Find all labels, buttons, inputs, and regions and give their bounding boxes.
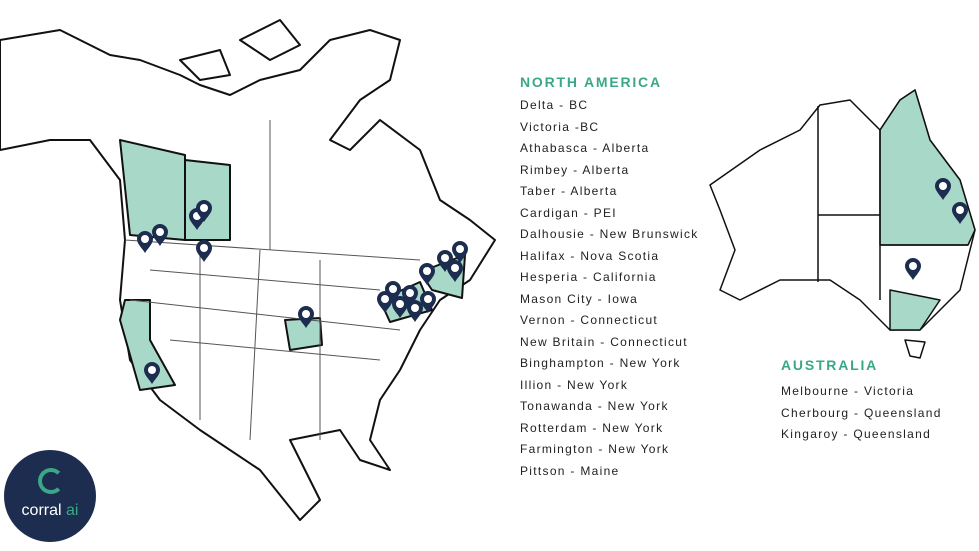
- list: australia: Kingaroy - Queensland: [781, 427, 931, 441]
- list: north america: Victoria -BC: [520, 120, 599, 134]
- list: north america: Vernon - Connecticut: [520, 313, 658, 327]
- region: BC: [120, 140, 185, 240]
- list: north america: Delta - BC: [520, 98, 588, 112]
- list: north america: [520, 98, 699, 478]
- icon: logo mark: [38, 468, 64, 494]
- map: australia: [710, 90, 975, 358]
- logo: [4, 450, 96, 542]
- logo text: corral ai: [22, 502, 78, 519]
- list: north america: Pittson - Maine: [520, 464, 620, 478]
- list: australia: [781, 384, 942, 441]
- list: australia: Melbourne - Victoria: [781, 384, 914, 398]
- list: north america: Dalhousie - New Brunswick: [520, 227, 699, 241]
- region: New York: [380, 282, 432, 322]
- list: north america: Cardigan - PEI: [520, 206, 617, 220]
- map: north america: [0, 20, 495, 520]
- list: north america: Taber - Alberta: [520, 184, 618, 198]
- region: Alberta: [185, 160, 230, 240]
- region: Iowa: [285, 318, 322, 350]
- list: north america: Tonawanda - New York: [520, 399, 669, 413]
- list: north america: Halifax - Nova Scotia: [520, 248, 659, 262]
- list: north america: Hesperia - California: [520, 270, 657, 284]
- list: north america: Athabasca - Alberta: [520, 141, 649, 155]
- list: north america: New Britain - Connecticut: [520, 334, 688, 348]
- pins: [137, 178, 968, 384]
- list: north america: Illion - New York: [520, 378, 628, 392]
- heading: north america: NORTH AMERICA: [520, 74, 662, 90]
- region: California: [120, 300, 175, 390]
- heading: australia: AUSTRALIA: [781, 357, 878, 373]
- list: north america: Binghampton - New York: [520, 356, 681, 370]
- list: north america: Mason City - Iowa: [520, 292, 638, 306]
- region: maritimes: [420, 255, 465, 298]
- list: australia: Cherbourg - Queensland: [781, 406, 942, 420]
- list: north america: Rimbey - Alberta: [520, 162, 630, 176]
- list: north america: Rotterdam - New York: [520, 420, 663, 434]
- list: north america: Farmington - New York: [520, 442, 669, 456]
